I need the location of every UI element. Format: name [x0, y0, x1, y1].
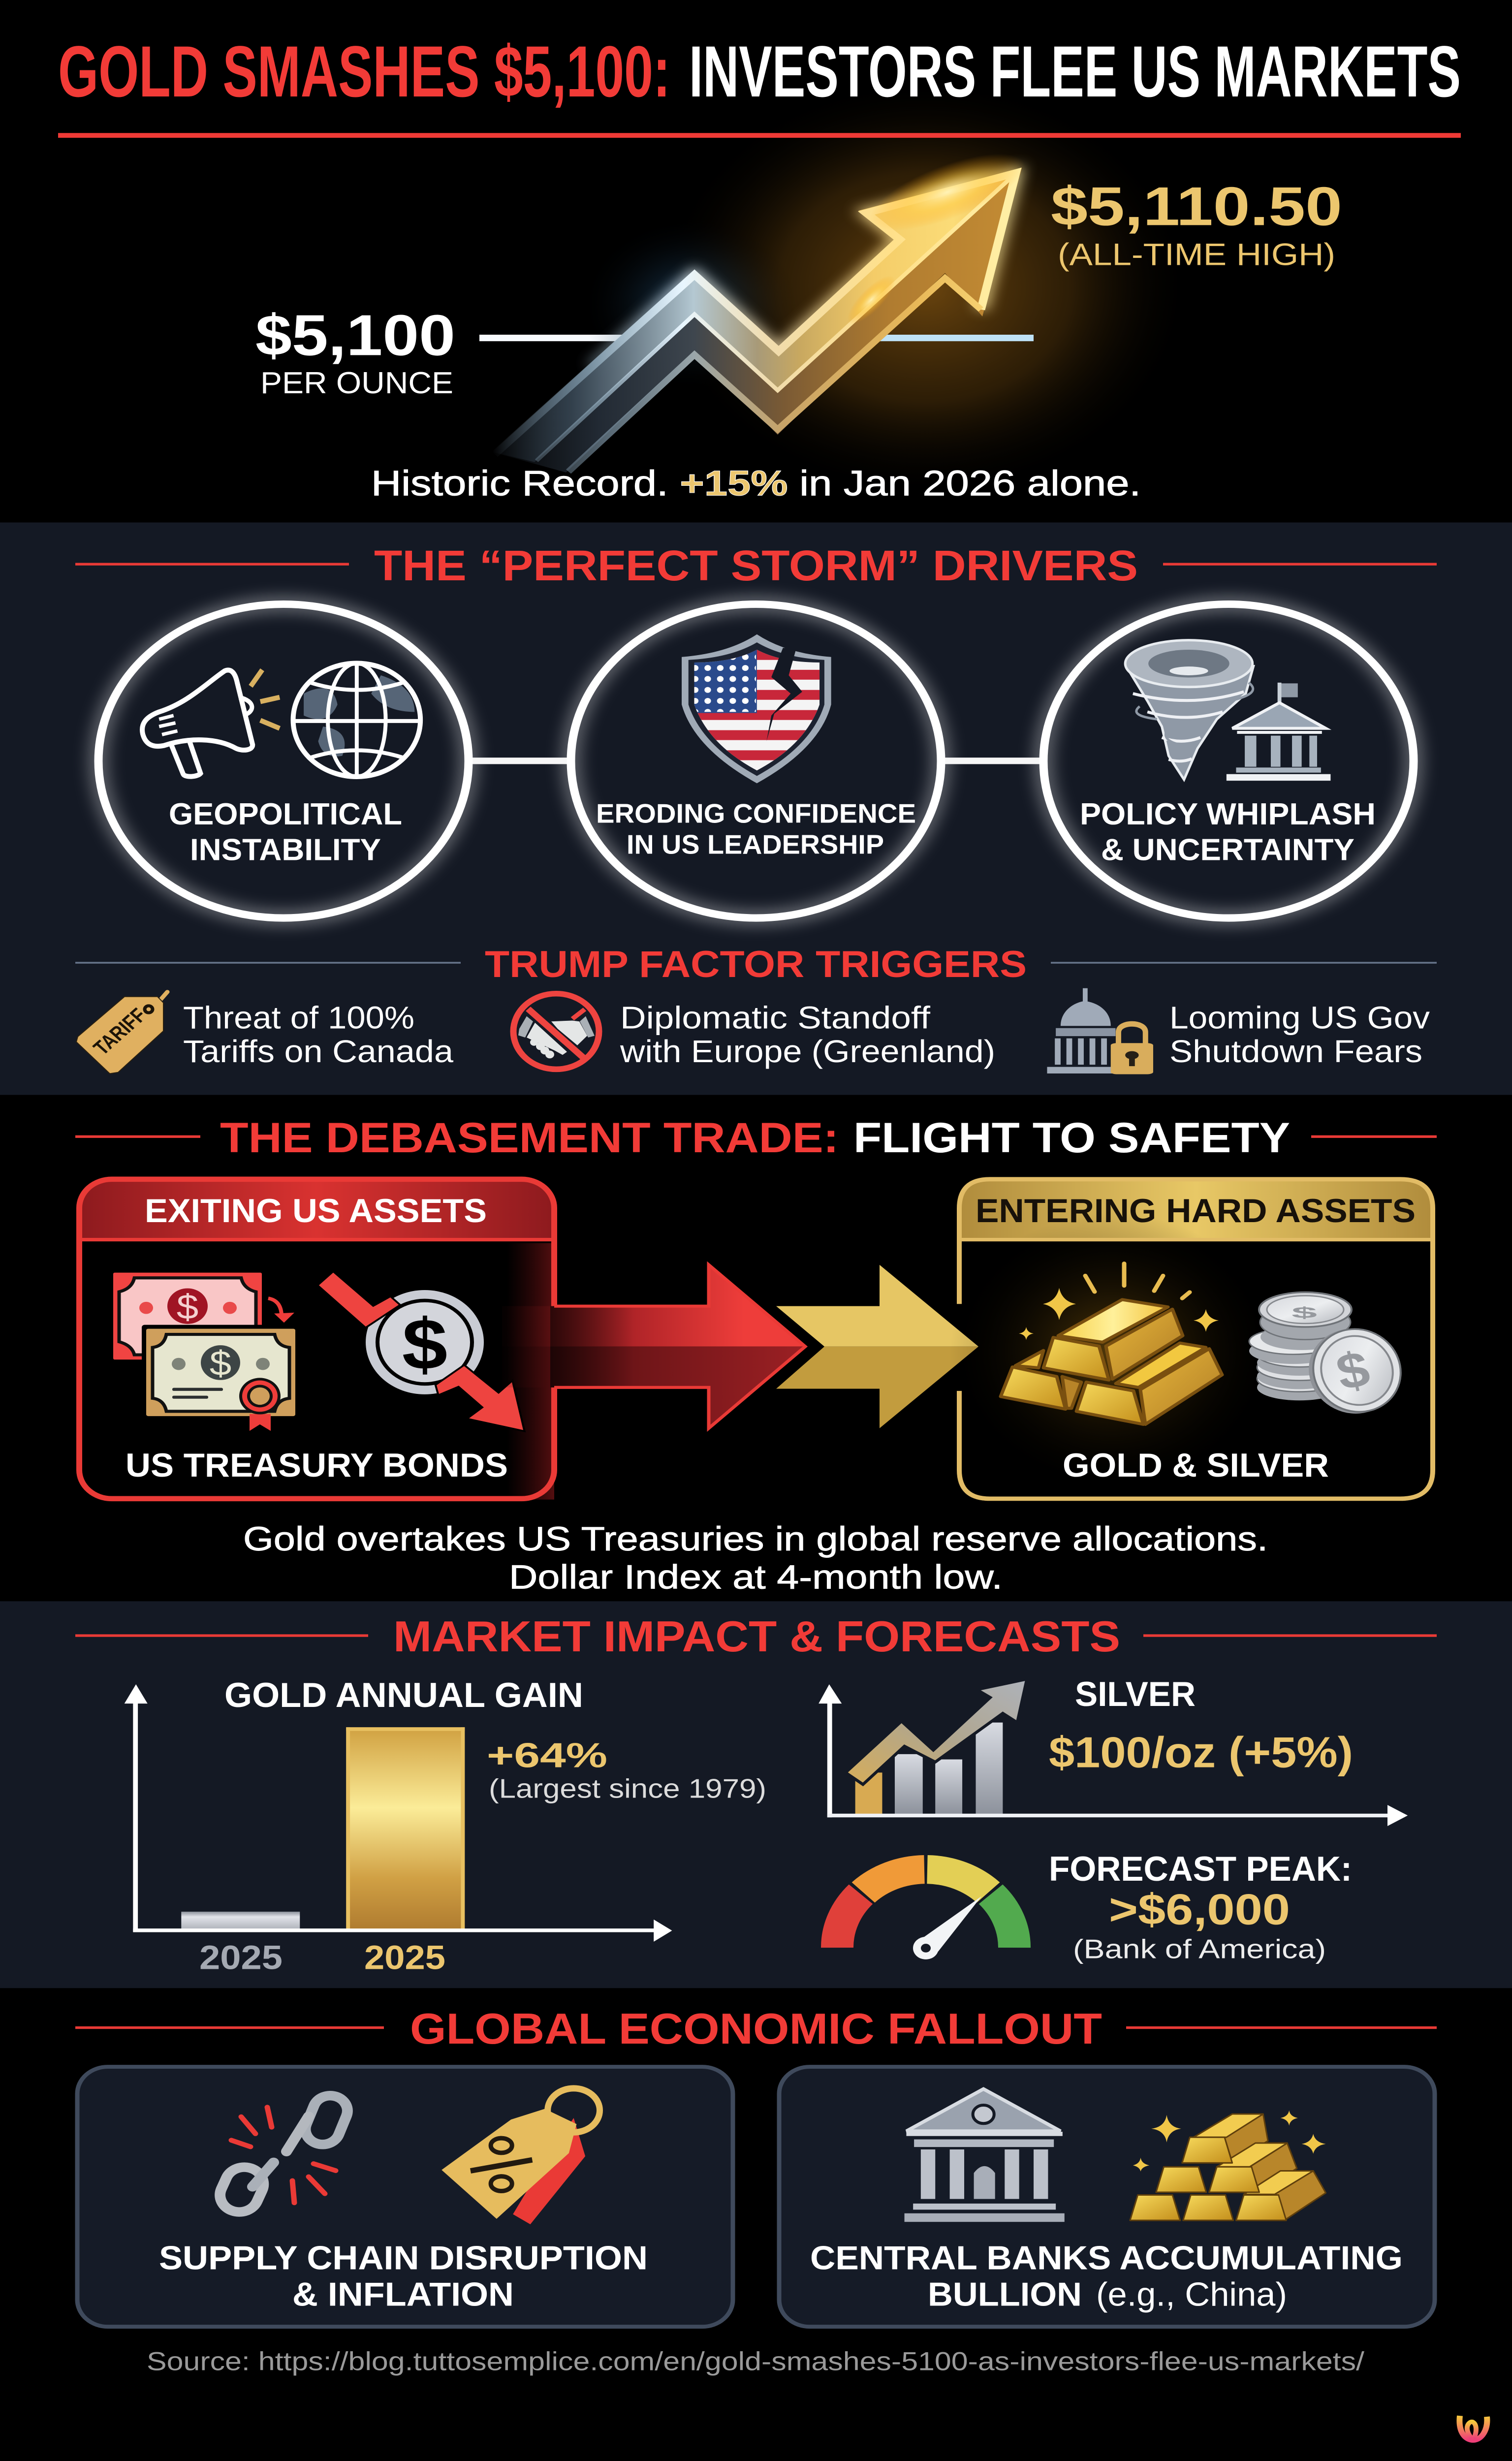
label: SUPPLY CHAIN DISRUPTION	[159, 2240, 648, 2277]
axis labels: 2025	[199, 1938, 283, 1976]
bars	[181, 1727, 465, 1929]
caption: reserve allocations: Dollar Index at 4-month low.	[509, 1558, 1003, 1596]
panel: global economic fallout	[75, 2005, 1487, 2440]
label	[159, 2240, 648, 2313]
label: (e.g., China)	[1096, 2276, 1287, 2313]
trigger: government shutdown	[1047, 988, 1430, 1074]
icon: treasury bills: $	[210, 1344, 231, 1383]
circle glow	[98, 604, 1414, 918]
connectors	[469, 757, 1043, 764]
box: entering hard assets	[950, 1179, 1433, 1499]
icon: gauge	[837, 1869, 1014, 1959]
price line	[479, 335, 1034, 341]
axes	[125, 1684, 672, 1942]
arrow: gold entry	[776, 1265, 978, 1428]
icon: gold pile	[1130, 2111, 1326, 2220]
icon: falling dollar coin: $	[402, 1304, 447, 1385]
label	[596, 799, 916, 860]
forecast gauge	[837, 1849, 1352, 1964]
icon: treasury bills: $	[177, 1288, 198, 1326]
icon: megaphone and globe	[142, 663, 420, 777]
icon: falling dollar coin	[319, 1273, 523, 1430]
value: (Largest since 1979)	[489, 1774, 766, 1804]
label: $5,100 per ounce: $5,100	[255, 303, 455, 368]
icon: silver coins	[1249, 1292, 1413, 1424]
caption: reserve allocations	[243, 1519, 1268, 1596]
chart: gold annual gain	[125, 1675, 766, 1976]
source line: Source: https://blog.tuttosemplice.com/en/gold-smashes-5100-as-investors-flee-us-markets/	[147, 2347, 1364, 2376]
icon: gold bars	[1001, 1263, 1222, 1424]
rising gold arrow	[492, 138, 1036, 473]
label: CENTRAL BANKS ACCUMULATING	[810, 2240, 1403, 2277]
card: central banks	[779, 2067, 1435, 2327]
heading: market impact: MARKET IMPACT & FORECASTS	[393, 1612, 1120, 1661]
icon: central bank	[905, 2089, 1065, 2222]
gold glow behind arrow	[660, 78, 1191, 496]
icon: no handshake	[513, 994, 599, 1069]
heading: market impact	[75, 1612, 1437, 1661]
heading: global economic fallout	[75, 2005, 1437, 2053]
panel: debasement trade	[75, 1113, 1437, 1596]
title: GOLD SMASHES $5,100:	[58, 31, 670, 112]
heading: debasement trade	[75, 1113, 1437, 1162]
icon: silver coins: $	[1292, 1304, 1317, 1321]
historic record caption: Historic Record. +15% in Jan 2026 alone.	[371, 464, 1141, 504]
panel background	[0, 1601, 1512, 1988]
label: & INFLATION	[292, 2276, 514, 2313]
axis labels: 2025	[364, 1938, 445, 1976]
trigger: diplomatic standoff	[513, 994, 995, 1069]
text: Threat of 100%	[183, 1001, 414, 1035]
forecast text: FORECAST PEAK:	[1049, 1849, 1352, 1888]
driver circle: eroding confidence	[571, 604, 941, 918]
chart title: GOLD ANNUAL GAIN	[224, 1675, 583, 1714]
chart title: SILVER	[1075, 1674, 1196, 1713]
value: +64%	[487, 1736, 607, 1775]
label	[169, 797, 402, 867]
icon: cracked US shield	[682, 634, 831, 783]
value	[487, 1736, 766, 1804]
label	[810, 2240, 1403, 2313]
heading: debasement trade: THE DEBASEMENT TRADE:	[220, 1113, 839, 1162]
bars and trend arrow	[846, 1679, 1027, 1814]
panel background	[0, 522, 1512, 1095]
heading: debasement trade: FLIGHT TO SAFETY	[853, 1113, 1290, 1162]
icon: percent price tag	[441, 2088, 599, 2224]
label: all-time high: $5,110.50	[1051, 176, 1342, 237]
panel: market impact and forecasts	[0, 1601, 1512, 1988]
caption: reserve allocations: Gold overtakes US Treasuries in global reserve allocations.	[243, 1519, 1268, 1558]
value: $100/oz (+5%)	[1049, 1728, 1353, 1776]
box label: US TREASURY BONDS	[126, 1447, 508, 1484]
panel: perfect storm drivers	[0, 522, 1512, 1095]
axes	[819, 1684, 1408, 1826]
label: IN US LEADERSHIP	[627, 830, 884, 860]
label: all-time high: (ALL-TIME HIGH)	[1058, 238, 1335, 272]
icon: tariff tag: TARIFF	[89, 1004, 151, 1059]
heading: global economic fallout: GLOBAL ECONOMIC FALLOUT	[410, 2005, 1102, 2053]
title rule	[58, 133, 1461, 138]
icon: treasury bills	[113, 1273, 297, 1431]
text: Tariffs on Canada	[183, 1035, 453, 1069]
heading: trump factor triggers	[75, 944, 1437, 985]
label: GEOPOLITICAL	[169, 797, 402, 831]
icon: capitol and padlock	[1047, 988, 1153, 1074]
icon: tornado and government building	[1125, 640, 1330, 781]
label: POLICY WHIPLASH	[1080, 797, 1376, 831]
axis labels	[199, 1938, 445, 1976]
icon: broken chain	[214, 2091, 352, 2217]
header label: EXITING US ASSETS	[145, 1192, 487, 1230]
section: header and price hero	[58, 31, 1461, 504]
driver circle: policy whiplash	[1043, 604, 1414, 918]
header label: ENTERING HARD ASSETS	[976, 1192, 1416, 1230]
label: BULLION	[928, 2276, 1082, 2313]
chart: silver	[819, 1674, 1408, 1826]
text: with Europe (Greenland)	[620, 1035, 995, 1069]
box: exiting US assets	[79, 1179, 554, 1500]
forecast text: (Bank of America)	[1073, 1934, 1326, 1964]
text	[1169, 1001, 1430, 1069]
label: ERODING CONFIDENCE	[596, 799, 916, 829]
label: $5,100 per ounce: PER OUNCE	[260, 366, 453, 400]
box label: GOLD & SILVER	[1063, 1447, 1329, 1484]
card: supply chain	[77, 2067, 733, 2327]
trigger: tariffs	[76, 992, 453, 1073]
heading: perfect storm drivers: THE “PERFECT STORM” DRIVERS	[374, 541, 1138, 590]
text: Diplomatic Standoff	[620, 1001, 930, 1035]
text	[620, 1001, 995, 1069]
text: Looming US Gov	[1169, 1001, 1430, 1035]
label	[1080, 797, 1376, 867]
text	[183, 1001, 453, 1069]
heading: perfect storm drivers	[75, 541, 1437, 590]
title	[58, 31, 1461, 112]
icon: tariff tag	[76, 992, 167, 1073]
label: $5,100 per ounce	[255, 303, 455, 400]
text: Shutdown Fears	[1169, 1035, 1422, 1069]
label: & UNCERTAINTY	[1101, 832, 1354, 867]
logo	[1459, 2416, 1487, 2440]
icon: silver coins: $	[1331, 1340, 1375, 1401]
heading: trump factor triggers: TRUMP FACTOR TRIGGERS	[485, 944, 1027, 985]
forecast text	[1049, 1849, 1352, 1964]
forecast text: >$6,000	[1109, 1885, 1290, 1933]
driver circle: geopolitical instability	[98, 604, 469, 918]
label: INSTABILITY	[190, 832, 381, 867]
label: all-time high	[1051, 176, 1342, 272]
arrow: red exit	[502, 1265, 805, 1428]
